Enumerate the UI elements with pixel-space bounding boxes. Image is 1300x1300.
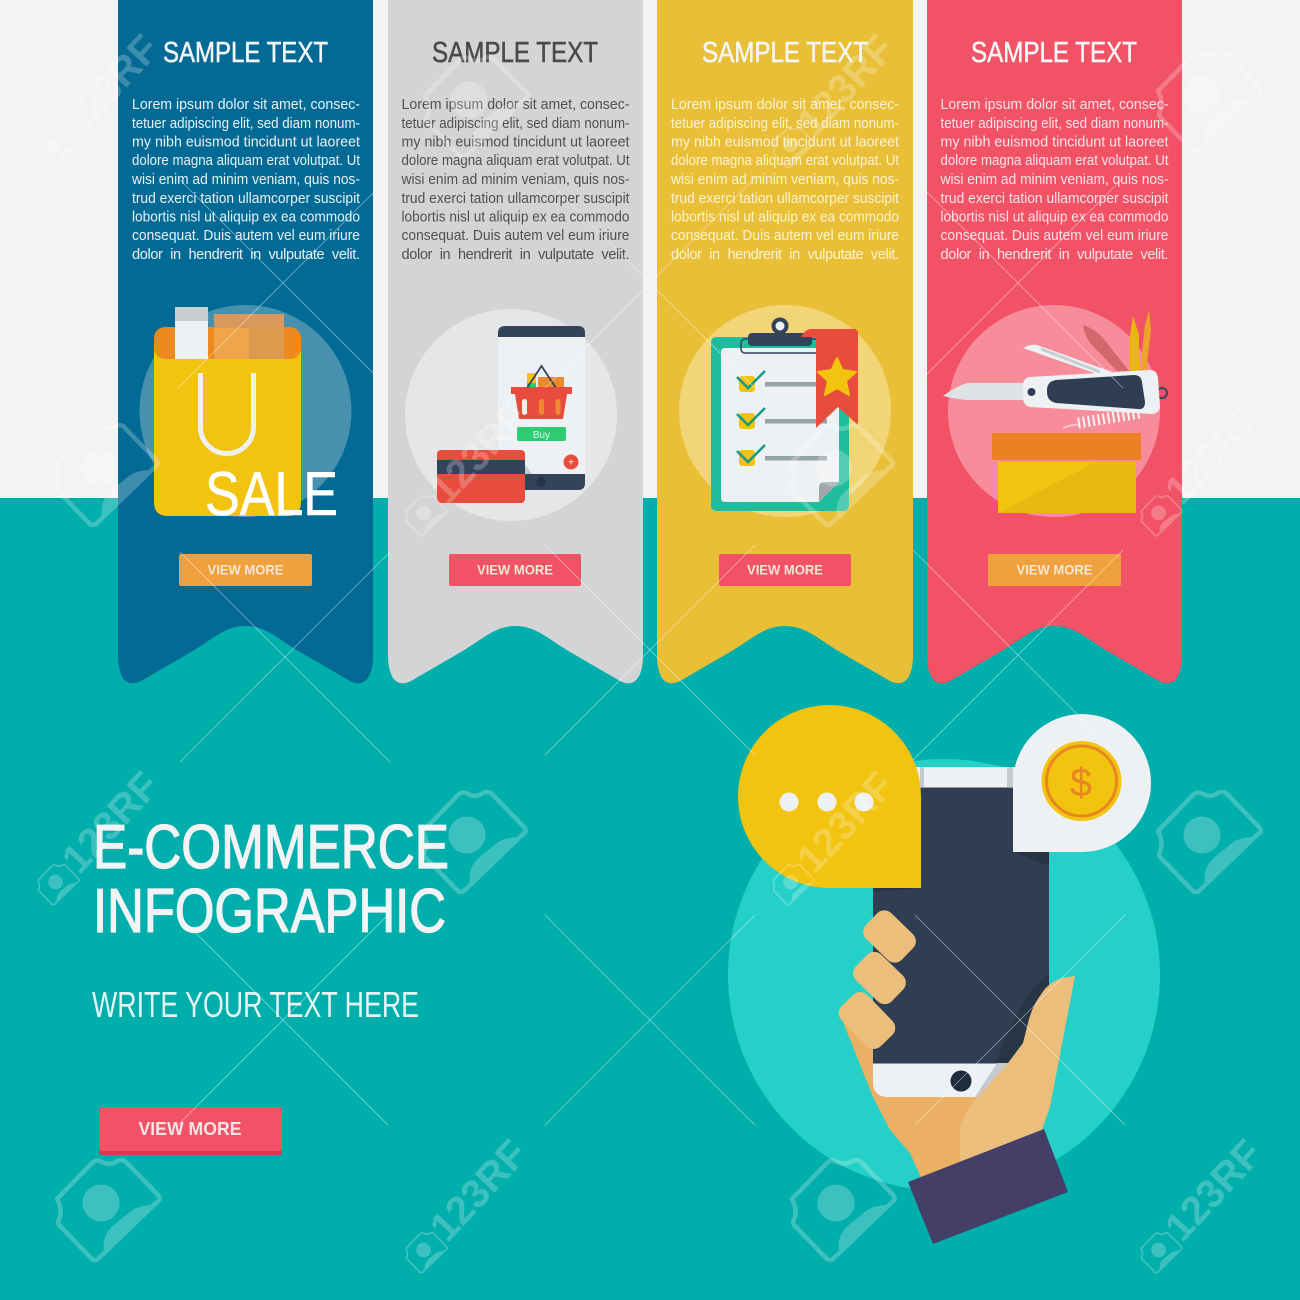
heading: sample text 3: SAMPLE TEXT [702, 37, 868, 69]
panel: sale ribbon [118, 0, 373, 683]
text block: lorem 3: dolore magna aliquam erat volutpat. Ut [671, 153, 899, 169]
text block: lorem 4: wisi enim ad minim veniam, quis nos- [940, 172, 1169, 188]
text block: lorem 1: dolor in hendrerit in vulputate velit. [132, 247, 360, 263]
title [93, 813, 449, 946]
text block: lorem 1: dolore magna aliquam erat volutpat. Ut [132, 153, 360, 169]
text block: lorem 4 [940, 97, 1169, 263]
text block: lorem 1: tetuer adipiscing elit, sed diam nonum- [132, 116, 360, 132]
text block: lorem 3: wisi enim ad minim veniam, quis nos- [670, 172, 899, 188]
heading: sample text 2: SAMPLE TEXT [432, 37, 598, 69]
icon: phone with basket and card [405, 309, 617, 521]
button: view more 3 [719, 554, 851, 586]
button: main view more [99, 1107, 282, 1155]
subtitle: WRITE YOUR TEXT HERE [92, 984, 419, 1025]
text block: lorem 3: Lorem ipsum dolor sit amet, consec- [671, 97, 899, 113]
panel: mobile shopping ribbon [388, 0, 643, 683]
text block: lorem 3: my nibh euismod tincidunt ut laoreet [671, 134, 899, 150]
text block: lorem 3: dolor in hendrerit in vulputate velit. [671, 247, 899, 263]
text: 123RF [1157, 395, 1271, 513]
palm [841, 1017, 1010, 1180]
text: 123RF [789, 764, 903, 882]
fingers [835, 906, 920, 1053]
coin bubble: $ [1070, 761, 1092, 805]
text block: lorem 3 [670, 97, 899, 263]
text block: lorem 4: dolore magna aliquam erat volutpat. Ut [940, 153, 1168, 169]
text block: lorem 2: wisi enim ad minim veniam, quis nos- [401, 172, 630, 188]
text: 123RF [422, 1132, 536, 1250]
title: INFOGRAPHIC [93, 877, 446, 946]
text block: lorem 1 [131, 97, 360, 263]
text block: lorem 1: lobortis nisl ut aliquip ex ea commodo [132, 210, 360, 226]
text block: lorem 1: Lorem ipsum dolor sit amet, consec- [132, 97, 360, 113]
background circle [728, 759, 1160, 1191]
text block: lorem 1: my nibh euismod tincidunt ut laoreet [132, 134, 360, 150]
icon: pocket knife over box [943, 305, 1167, 517]
button: view more 4: VIEW MORE [1016, 562, 1092, 578]
text block: lorem 3: tetuer adipiscing elit, sed diam nonum- [671, 116, 899, 132]
button: view more 2: VIEW MORE [477, 562, 553, 578]
text block: lorem 1: trud exerci tation ullamcorper suscipit [132, 191, 360, 207]
text block: lorem 4: consequat. Duis autem vel eum iriure [940, 228, 1168, 244]
text block: lorem 4: tetuer adipiscing elit, sed diam nonum- [940, 116, 1169, 132]
text block: lorem 3: consequat. Duis autem vel eum iriure [671, 228, 899, 244]
text block: lorem 3: lobortis nisl ut aliquip ex ea commodo [671, 210, 899, 226]
icon: phone with basket and card: Buy [533, 430, 550, 441]
thumb [960, 976, 1075, 1162]
coin bubble [1013, 714, 1151, 852]
text block: lorem 4: my nibh euismod tincidunt ut laoreet [940, 134, 1168, 150]
text: 123RF [422, 395, 536, 513]
text block: lorem 2: trud exerci tation ullamcorper suscipit [402, 191, 630, 207]
text block: lorem 2: dolor in hendrerit in vulputate velit. [402, 247, 630, 263]
button: view more 4 [988, 554, 1121, 586]
text block: lorem 2: my nibh euismod tincidunt ut laoreet [402, 134, 630, 150]
text: 123RF [54, 27, 168, 145]
text block: lorem 4: trud exerci tation ullamcorper suscipit [940, 191, 1168, 207]
text block: lorem 1: consequat. Duis autem vel eum iriure [132, 228, 360, 244]
heading: sample text 1: SAMPLE TEXT [163, 37, 328, 69]
sleeve [908, 1129, 1068, 1244]
text: 123RF [54, 764, 168, 882]
icon: clipboard checklist with bookmark [679, 305, 891, 517]
text block: lorem 4: dolor in hendrerit in vulputate velit. [940, 247, 1168, 263]
panel: multi-tool ribbon [927, 0, 1182, 683]
heading: sample text 4: SAMPLE TEXT [971, 37, 1137, 69]
icon: shopping bag with sale label [140, 305, 352, 529]
text block: lorem 2: lobortis nisl ut aliquip ex ea commodo [402, 210, 630, 226]
button: main view more: VIEW MORE [138, 1119, 242, 1139]
text block: lorem 1: wisi enim ad minim veniam, quis nos- [131, 172, 360, 188]
text block: lorem 2: Lorem ipsum dolor sit amet, consec- [402, 97, 630, 113]
button: view more 1: VIEW MORE [208, 562, 284, 578]
title: E-COMMERCE [93, 813, 449, 882]
chat bubble [738, 705, 921, 888]
text block: lorem 4: lobortis nisl ut aliquip ex ea commodo [940, 210, 1168, 226]
phone [873, 767, 1049, 1097]
illustration: hand holding smartphone [728, 705, 1160, 1244]
text block: lorem 4: Lorem ipsum dolor sit amet, consec- [940, 97, 1169, 113]
text block: lorem 2: dolore magna aliquam erat volutpat. Ut [402, 153, 630, 169]
text block: lorem 3: trud exerci tation ullamcorper suscipit [671, 191, 899, 207]
text: 123RF [789, 27, 903, 145]
button: view more 3: VIEW MORE [747, 562, 823, 578]
button: view more 2 [449, 554, 581, 586]
text block: lorem 2: consequat. Duis autem vel eum iriure [402, 228, 630, 244]
icon: phone with basket and card: + [568, 458, 574, 468]
panel: checklist ribbon [657, 0, 913, 683]
button: view more 1 [179, 554, 312, 586]
text block: lorem 2 [401, 97, 630, 263]
icon: shopping bag with sale label: SALE [205, 460, 338, 529]
text: 123RF [1157, 1132, 1271, 1250]
text block: lorem 2: tetuer adipiscing elit, sed diam nonum- [402, 116, 630, 132]
